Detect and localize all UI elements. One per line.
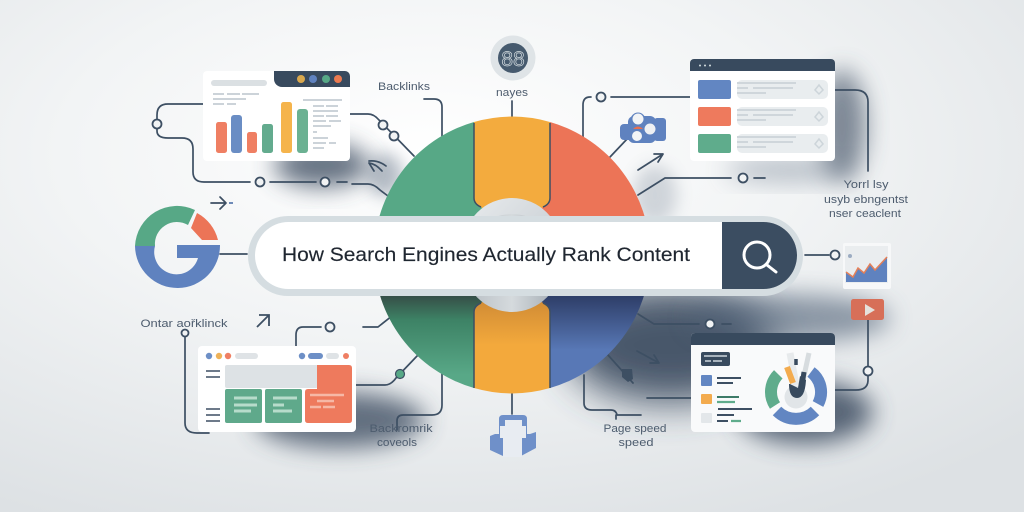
central ring chart (374, 117, 650, 393)
placeholder text lines (213, 94, 259, 104)
legend (701, 375, 752, 423)
green cards (225, 389, 262, 423)
panel: dashboard window (691, 333, 835, 432)
icon: magnifier (744, 242, 776, 272)
label: bottom caption left: Backromrik (370, 423, 433, 435)
label: page speed (604, 423, 666, 449)
title: How Search Engines Actually Rank Content (282, 244, 691, 266)
window header (274, 71, 350, 87)
icon: top circle badge (490, 36, 536, 80)
label: nayes: nayes (496, 87, 529, 99)
row 2 (698, 107, 828, 126)
label: right caption: nser ceaclent (829, 208, 901, 220)
icon: line chart card (843, 243, 891, 289)
connector nodes (152, 92, 872, 378)
ring: top green segment (374, 122, 512, 255)
ring: bottom blue segment (512, 255, 650, 388)
row 3 (698, 134, 828, 153)
label: right caption (824, 179, 908, 220)
panel: page layout window (198, 346, 356, 432)
label: bottom caption left (370, 423, 433, 449)
icon: top circle badge: 88 (501, 48, 525, 71)
row 1 (698, 80, 828, 99)
icon: network cluster (620, 112, 666, 143)
icon: pin marker (622, 369, 633, 382)
ring: bottom green segment (374, 255, 512, 388)
icon: swoosh marks (369, 161, 386, 171)
label: page speed: Page speed (604, 423, 666, 435)
icon: video play (851, 299, 884, 320)
label: left caption: Ontar aořklinck (140, 318, 228, 330)
arrow: down right (637, 351, 659, 363)
connector lines (157, 90, 868, 433)
red card (305, 365, 352, 423)
donut gauge (771, 353, 821, 419)
ring dividers and hole (463, 123, 561, 388)
search button (722, 222, 797, 289)
arrow: up right lower left (257, 315, 269, 327)
bars (216, 102, 308, 153)
panel: bar chart window (203, 71, 350, 161)
search bar (248, 216, 803, 296)
icon: G logo (135, 206, 220, 288)
label: bottom caption left: coveols (377, 437, 418, 449)
panel: ranked list window (690, 59, 835, 161)
ring: top red segment (512, 122, 650, 255)
label: right caption: Yorrl lsy (844, 179, 889, 191)
ring: bottom orange segment (474, 280, 550, 393)
ring: top orange segment (474, 117, 550, 230)
label: right caption: usyb ebngentst (824, 194, 908, 206)
label: backlinks: Backlinks (378, 81, 431, 93)
icon: robot (490, 415, 536, 457)
label: page speed: speed (618, 437, 654, 449)
soft shadows (255, 70, 890, 448)
arrow: near G logo (211, 197, 233, 209)
arrow: up right near list (638, 154, 663, 170)
